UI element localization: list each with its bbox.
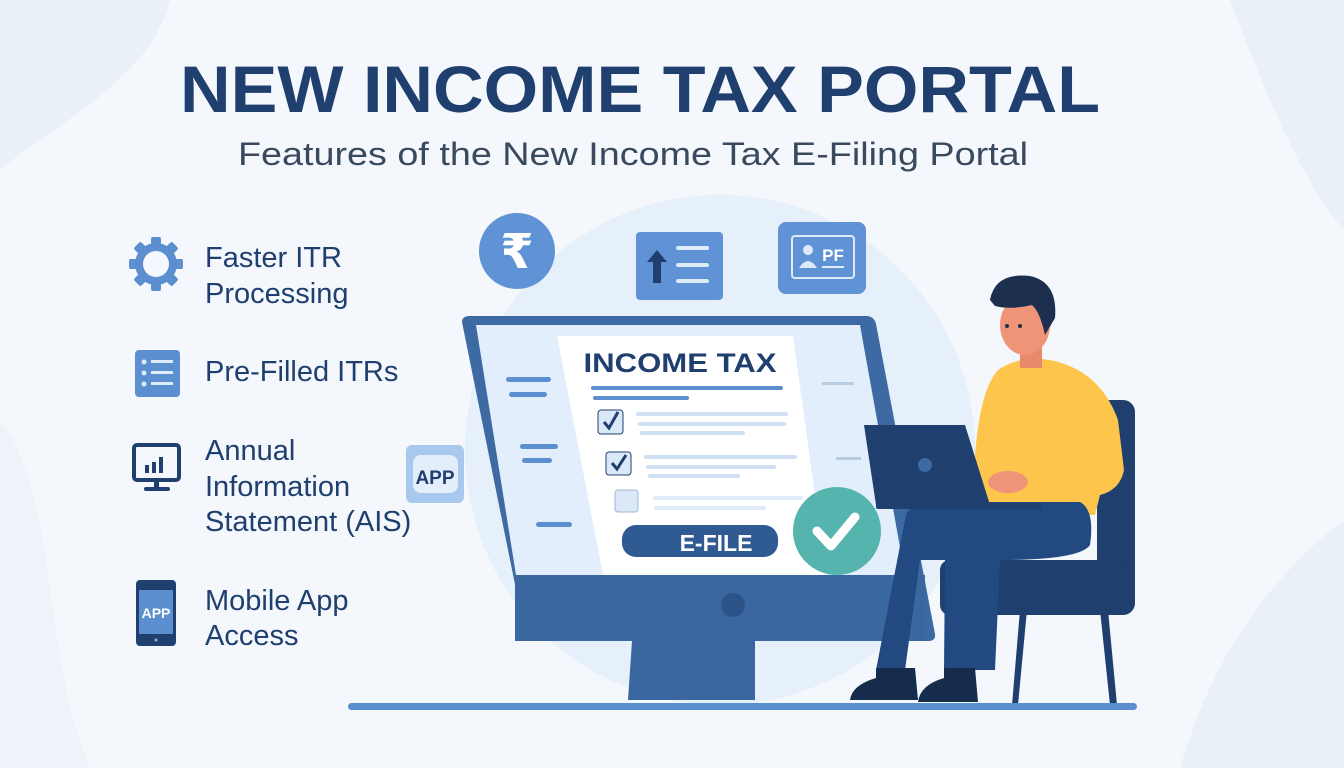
monitor: E-FILE bbox=[680, 530, 752, 556]
icon: APP badge bbox=[406, 445, 464, 503]
screen heading: INCOME TAX bbox=[584, 348, 776, 378]
background blob bbox=[465, 195, 975, 705]
check circle bbox=[793, 487, 881, 575]
person with chair and laptop bbox=[850, 276, 1135, 705]
icon: list bbox=[135, 350, 180, 397]
icon: upload card bbox=[636, 232, 723, 300]
icon: PF card: PF bbox=[822, 246, 844, 265]
icon: APP badge: APP bbox=[415, 468, 455, 489]
text: Faster ITR Processing: Processing bbox=[205, 278, 348, 310]
icon: mobile app bbox=[136, 580, 176, 646]
icon: monitor chart bbox=[134, 445, 179, 491]
text: Annual Information Statement: Statement (AIS) bbox=[205, 506, 411, 538]
feature list bbox=[129, 237, 464, 652]
subtitle: Features of the New Income Tax E-Filing Portal bbox=[238, 136, 1028, 172]
icon: mobile app: APP bbox=[142, 605, 170, 621]
text: Annual Information Statement: Information bbox=[205, 471, 350, 503]
floor line bbox=[348, 703, 1137, 710]
E-FILE button bbox=[622, 525, 778, 557]
text: Mobile App Access: Mobile App bbox=[205, 585, 348, 617]
monitor bbox=[462, 316, 935, 700]
text: Faster ITR Processing: Faster ITR bbox=[205, 242, 342, 274]
icon: rupee: ₹ bbox=[500, 224, 534, 280]
text: Annual Information Statement: Annual bbox=[205, 435, 295, 467]
icon: rupee bbox=[479, 213, 555, 289]
text: Pre-Filled ITRs: Pre-Filled ITRs bbox=[205, 356, 398, 388]
icon: PF card bbox=[778, 222, 866, 294]
checklist bbox=[598, 410, 623, 434]
text: Mobile App Access: Access bbox=[205, 620, 298, 652]
title: NEW INCOME TAX PORTAL bbox=[180, 52, 1100, 126]
icon: gear bbox=[129, 237, 183, 291]
